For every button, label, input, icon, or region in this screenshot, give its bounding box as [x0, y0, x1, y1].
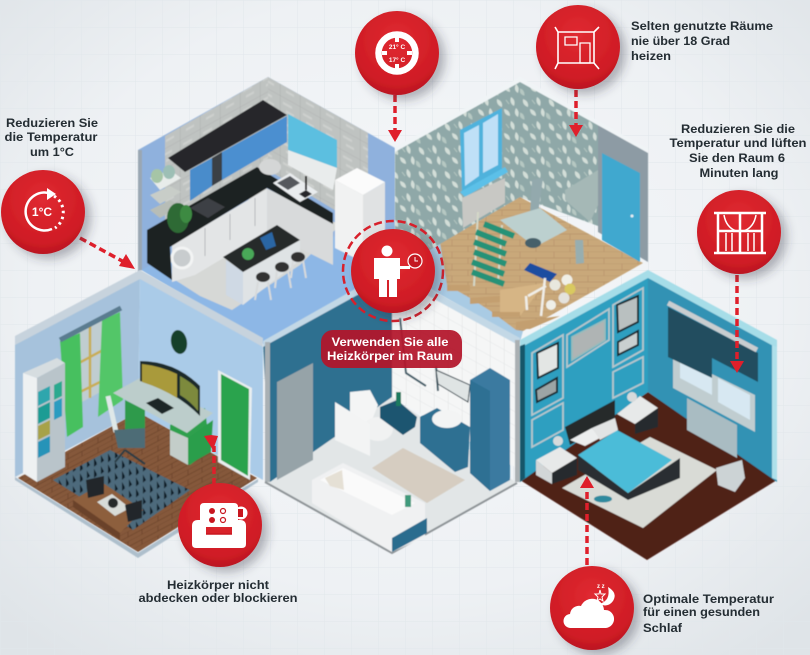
panel: renovation room: [395, 77, 648, 342]
icon: armchair: [178, 483, 262, 567]
text: rarely used rooms: [631, 19, 773, 63]
left wall: [15, 272, 140, 477]
left curtain: [60, 333, 83, 437]
callout: use all radiators: Heizkörper im Raum: [327, 349, 453, 363]
text: lower temperature and ventilate: Minuten lang: [700, 166, 778, 180]
upper blue cabinets: [190, 116, 287, 201]
icon: thermostat: [355, 11, 439, 95]
icon: thermostat: 21° C: [389, 43, 405, 51]
text: lower temperature and ventilate: Sie den Raum 6: [689, 151, 785, 165]
arrow: temperature to kitchen: [80, 238, 135, 269]
wall clock: [169, 329, 189, 355]
rug: [562, 437, 717, 528]
text: reduce temperature by 1 degree: [4, 116, 98, 159]
text: optimal sleep temperature: [643, 592, 774, 635]
wallpaper rolls: [500, 178, 584, 264]
radiator: [462, 178, 505, 228]
toilet: [350, 390, 393, 441]
arrow: ventilate down: [730, 275, 744, 373]
text: rarely used rooms: nie über 18 Grad: [631, 34, 730, 48]
floor: [18, 412, 257, 552]
panel: bathroom: [263, 268, 520, 553]
text: rarely used rooms: heizen: [631, 49, 671, 63]
roller blind: [668, 307, 758, 382]
right wall: [520, 270, 777, 482]
coffee table with turntable: [73, 476, 143, 540]
window: [460, 108, 508, 197]
bookshelf: [23, 358, 65, 482]
arrow: sleep up: [580, 476, 594, 565]
door: [218, 370, 252, 480]
window: [76, 318, 104, 402]
slippers: [594, 496, 612, 502]
text: do not cover radiators: abdecken oder blockieren: [138, 591, 298, 605]
shelves with plates: [150, 165, 181, 218]
tall cabinet: [470, 368, 510, 491]
right curtain: [98, 312, 123, 417]
text: lower temperature and ventilate: Reduzieren Sie die: [681, 122, 795, 136]
paint tray: [524, 263, 557, 282]
plant: [167, 203, 192, 233]
panel: bedroom: [520, 270, 777, 560]
blue stool cabinet: [380, 400, 417, 435]
stools: [255, 252, 306, 300]
text: reduce temperature by 1 degree: die Temperatur: [4, 130, 98, 144]
door: [602, 153, 640, 262]
panel: study room: [15, 270, 263, 558]
right wall: [15, 270, 263, 558]
radiator: [687, 398, 737, 458]
text: optimal sleep temperature: für einen gesunden: [643, 605, 760, 619]
chair and planks: [447, 278, 560, 329]
arrow: thermostat down: [388, 95, 402, 142]
left wall with wallpaper: [395, 80, 520, 270]
text: optimal sleep temperature: Schlaf: [643, 621, 683, 635]
kitchen floor tile: [172, 186, 340, 310]
floor: [440, 197, 643, 331]
kitchen island: [223, 225, 300, 305]
left wall: [263, 270, 392, 482]
armchair: [716, 460, 745, 492]
rug: [53, 450, 190, 530]
hob: [190, 198, 225, 218]
text: lower temperature and ventilate: Temperatur und lüften: [670, 136, 806, 150]
window: [673, 355, 755, 432]
monitor: [140, 361, 200, 416]
sink: [273, 173, 318, 202]
right wall: [263, 268, 520, 553]
nightstands: [536, 392, 658, 484]
curtain: [288, 114, 337, 190]
paint cans: [546, 274, 576, 310]
panel: kitchen room: [138, 77, 395, 345]
text: do not cover radiators: Heizkörper nicht: [167, 578, 269, 592]
bathtub: [312, 463, 427, 552]
icon: person with radiator: [343, 221, 443, 321]
text: optimal sleep temperature: Optimale Temperatur: [643, 592, 774, 606]
arrow: do not block up: [204, 435, 218, 485]
fridge: [335, 168, 385, 262]
desk chair: [108, 396, 145, 464]
text: reduce temperature by 1 degree: Reduzieren Sie: [6, 116, 98, 130]
black worktop: [147, 167, 333, 280]
icon: reduce 1 degree: 1°C: [32, 205, 52, 219]
arrow: rarely used rooms down: [569, 90, 583, 137]
floor: [520, 392, 777, 560]
text: lower temperature and ventilate: [670, 122, 806, 180]
bottle: [396, 392, 401, 406]
icon: window with curtains: [697, 190, 781, 274]
icon: rarely used room: [536, 5, 620, 89]
kitchen right wall: [268, 77, 395, 270]
subfloor: [395, 242, 523, 342]
curtain rod: [60, 308, 121, 340]
wall mirror: [436, 370, 470, 402]
callout: use all radiators: [321, 330, 462, 368]
wall mouldings and pictures: [532, 288, 643, 447]
partition: [335, 402, 370, 456]
kitchen left wall: [138, 77, 268, 272]
floor: [265, 397, 517, 553]
bed: [565, 400, 680, 500]
kitchen floor: [138, 190, 395, 345]
icon: reduce 1 degree: [1, 170, 85, 254]
dish rack: [259, 159, 281, 175]
left wall: [520, 272, 648, 482]
text: do not cover radiators: [138, 578, 298, 605]
desk: [113, 378, 213, 465]
right wall with wallpaper: [395, 77, 648, 262]
icon: sleeping cloud: z z: [597, 584, 605, 590]
hanging wallpaper: [565, 170, 598, 222]
icon: sleeping cloud: [550, 566, 634, 650]
callout: use all radiators: Verwenden Sie alle: [332, 335, 449, 349]
text: reduce temperature by 1 degree: um 1°C: [30, 145, 74, 159]
door: [277, 363, 313, 480]
vanity: [420, 408, 470, 472]
upper black counter: [168, 100, 287, 172]
icon: thermostat: 17° C: [389, 56, 405, 64]
bath mat: [372, 448, 465, 503]
blind rail: [668, 303, 757, 350]
green shelving: [472, 212, 514, 286]
text: rarely used rooms: Selten genutzte Räume: [631, 19, 773, 33]
lower white cabinets: [172, 189, 333, 282]
shower window frame: [400, 318, 438, 391]
